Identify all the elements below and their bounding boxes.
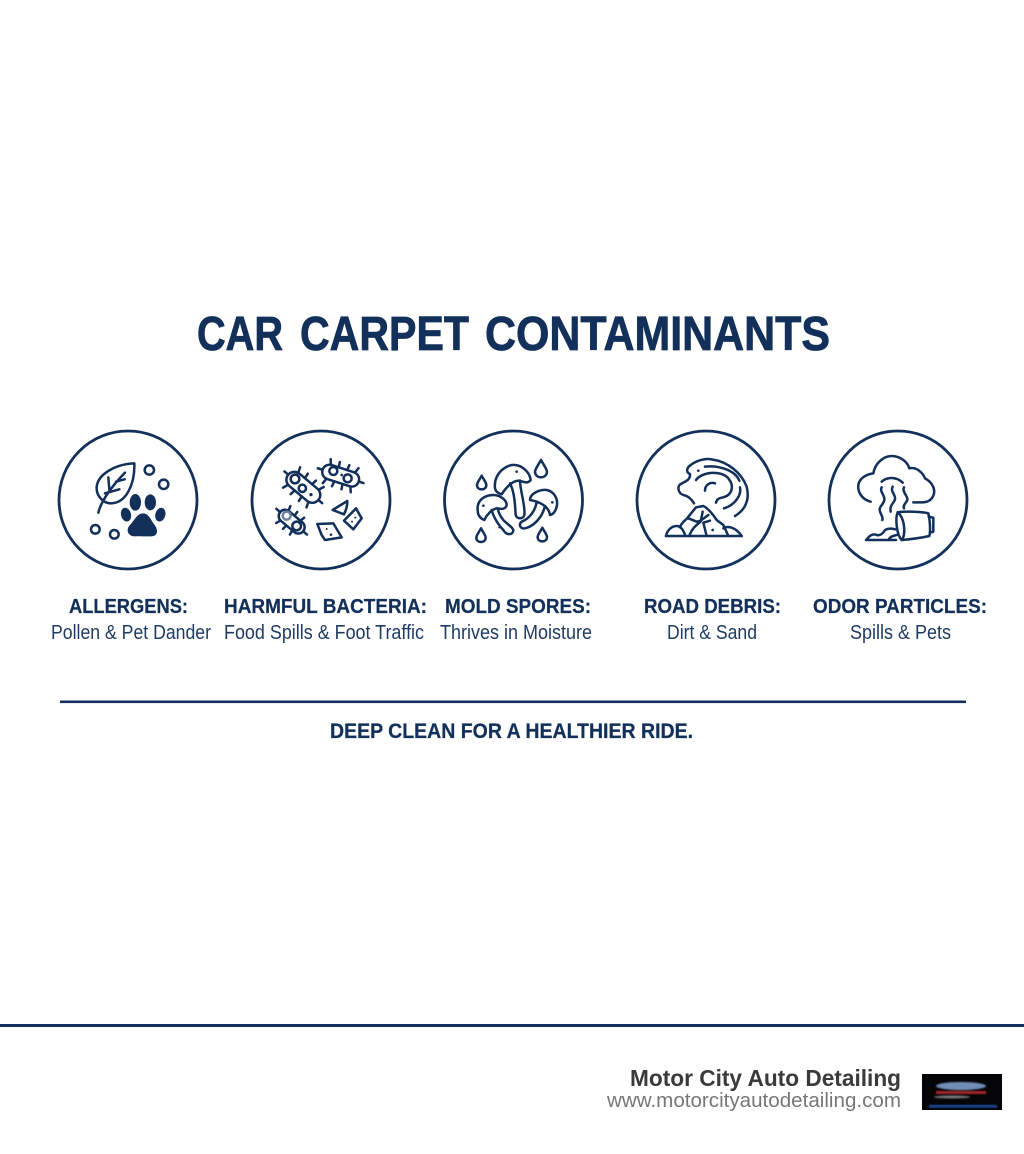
label: road debris: ROAD DEBRIS: (644, 595, 781, 618)
label: allergens: Pollen & Pet Dander (51, 622, 211, 644)
icon: odor particles, cloud and cup (829, 431, 967, 569)
label: odor particles (813, 595, 987, 644)
label: harmful bacteria: HARMFUL BACTERIA: (224, 595, 427, 618)
icon: allergens, leaf and paw (59, 431, 197, 569)
label: mold spores: Thrives in Moisture (440, 622, 592, 644)
icon: harmful bacteria (252, 431, 390, 569)
label: mold spores (440, 595, 592, 644)
label: road debris: Dirt & Sand (667, 622, 757, 644)
icon: road debris, swirl and rocks (637, 431, 775, 569)
title: CARPET (300, 308, 469, 361)
footer website: www.motorcityautodetailing.com (606, 1090, 901, 1112)
title: CAR (197, 308, 283, 361)
icon: mold spores, mushrooms (444, 431, 582, 569)
tagline: DEEP CLEAN FOR A HEALTHIER RIDE. (330, 720, 693, 743)
label: allergens: ALLERGENS: (69, 595, 188, 618)
label: road debris (644, 595, 781, 644)
label: harmful bacteria (224, 595, 427, 644)
label: mold spores: MOLD SPORES: (445, 595, 591, 618)
label: odor particles: ODOR PARTICLES: (813, 595, 987, 618)
logo (922, 1074, 1002, 1110)
title: CONTAMINANTS (485, 308, 830, 361)
label: odor particles: Spills & Pets (850, 622, 951, 644)
label: harmful bacteria: Food Spills & Foot Traffic (224, 622, 424, 644)
label: allergens (51, 595, 211, 644)
footer brand name: Motor City Auto Detailing (630, 1065, 901, 1091)
